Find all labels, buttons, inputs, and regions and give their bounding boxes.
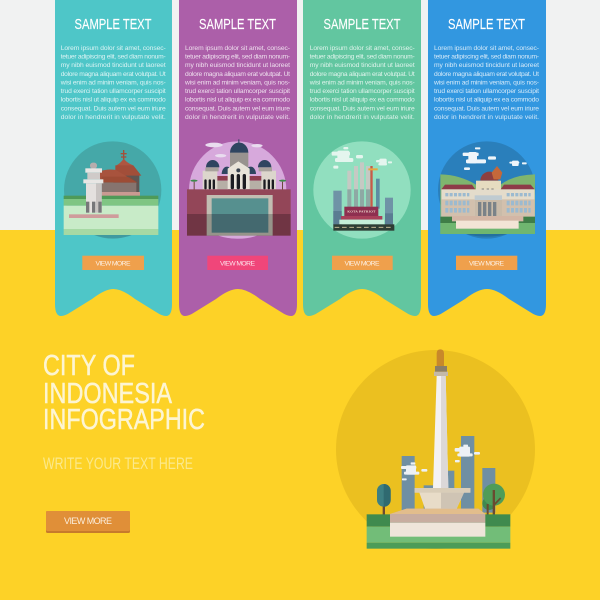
text block 4: [433, 45, 539, 121]
text block 2: trud exerci tation ullamcorper suscipit: [185, 88, 290, 95]
heading: sample text 3: SAMPLE TEXT: [324, 17, 401, 33]
text block 1: lobortis nisl ut aliquip ex ea commodo: [61, 96, 166, 104]
title: INFOGRAPHIC: [43, 404, 205, 436]
button: view more 2: VIEW MORE: [220, 260, 255, 267]
button: view more 3: VIEW MORE: [344, 260, 380, 267]
panel: green ribbon: [303, 0, 421, 316]
text block 4: trud exerci tation ullamcorper suscipit: [434, 88, 539, 95]
text block 2: dolore magna aliquam erat volutpat. Ut: [185, 71, 290, 78]
text block 2: [184, 45, 290, 121]
text block 3: dolore magna aliquam erat volutpat. Ut: [310, 71, 415, 78]
title: INDONESIA: [43, 378, 173, 410]
illustration: tower and temple: [64, 141, 161, 239]
text block 2: my nibh euismod tincidunt ut laoreet: [185, 62, 290, 69]
subtitle: WRITE YOUR TEXT HERE: [43, 455, 193, 473]
plinth: [390, 509, 485, 537]
tree right: [482, 484, 505, 515]
text block 3: lobortis nisl ut aliquip ex ea commodo: [310, 96, 415, 104]
button: view more 2: [207, 256, 268, 270]
background top: [0, 0, 600, 230]
text block 3: consequat. Duis autem vel eum iriure: [310, 106, 415, 112]
panel: purple ribbon: [179, 0, 297, 316]
text block 3: dolor in hendrerit in vulputate velit.: [310, 114, 415, 121]
text block 3: trud exerci tation ullamcorper suscipit: [310, 88, 415, 95]
illustration: kota patriot monument: KOTA PATRIOT: [347, 209, 376, 213]
tree left: [377, 484, 391, 515]
illustration: kota patriot monument: [313, 141, 411, 239]
skyline: [402, 436, 495, 513]
button: view more 4: [456, 256, 517, 270]
text block 4: lobortis nisl ut aliquip ex ea commodo: [434, 96, 539, 104]
backdrop circle: [336, 350, 535, 549]
text block 4: dolor in hendrerit in vulputate velit.: [434, 114, 539, 121]
illustration: governor office: [438, 141, 535, 239]
button: view more main: [46, 511, 130, 533]
text block 1: dolore magna aliquam erat volutpat. Ut: [61, 71, 166, 78]
heading: sample text 2: SAMPLE TEXT: [199, 17, 276, 33]
text block 4: consequat. Duis autem vel eum iriure: [434, 106, 539, 112]
text block 4: Lorem ipsum dolor sit amet, consec-: [434, 45, 539, 52]
button: view more main: VIEW MORE: [64, 516, 112, 526]
title: [43, 350, 205, 436]
panel: blue ribbon: [428, 0, 546, 316]
heading: sample text 4: SAMPLE TEXT: [448, 17, 525, 33]
text block 1: trud exerci tation ullamcorper suscipit: [61, 88, 166, 95]
text block 3: my nibh euismod tincidunt ut laoreet: [310, 62, 415, 69]
text block 3: tetuer adipiscing elit, sed diam nonum-: [310, 54, 415, 60]
text block 1: dolor in hendrerit in vulputate velit.: [61, 114, 166, 121]
text block 3: wisi enim ad minim veniam, quis nos-: [309, 80, 415, 86]
text block 2: tetuer adipiscing elit, sed diam nonum-: [185, 54, 290, 60]
illustration: national monument: [336, 349, 535, 549]
background yellow: [0, 230, 600, 600]
clouds: [401, 445, 480, 480]
heading: sample text 1: SAMPLE TEXT: [74, 17, 152, 33]
text block 1: [60, 45, 166, 121]
obelisk: [415, 349, 470, 509]
text block 4: my nibh euismod tincidunt ut laoreet: [434, 62, 539, 69]
text block 2: Lorem ipsum dolor sit amet, consec-: [185, 45, 290, 52]
text block 1: consequat. Duis autem vel eum iriure: [61, 106, 166, 112]
ground: [367, 514, 510, 527]
text block 1: my nibh euismod tincidunt ut laoreet: [61, 62, 166, 69]
text block 4: tetuer adipiscing elit, sed diam nonum-: [434, 54, 539, 60]
button: view more 3: [332, 256, 393, 270]
title: CITY OF: [43, 350, 135, 382]
text block 2: lobortis nisl ut aliquip ex ea commodo: [185, 96, 290, 104]
text block 3: [309, 45, 415, 121]
text block 1: tetuer adipiscing elit, sed diam nonum-: [61, 54, 166, 60]
text block 1: wisi enim ad minim veniam, quis nos-: [60, 80, 166, 86]
panel: teal ribbon: [55, 0, 172, 316]
text block 3: Lorem ipsum dolor sit amet, consec-: [310, 45, 415, 52]
text block 2: wisi enim ad minim veniam, quis nos-: [184, 80, 290, 86]
illustration: grand mosque: [187, 139, 291, 239]
text block 4: wisi enim ad minim veniam, quis nos-: [433, 80, 539, 86]
text block 2: consequat. Duis autem vel eum iriure: [185, 106, 290, 112]
button: view more 4: VIEW MORE: [469, 260, 504, 267]
button: view more 1: VIEW MORE: [96, 260, 131, 267]
text block 4: dolore magna aliquam erat volutpat. Ut: [434, 71, 539, 78]
text block 2: dolor in hendrerit in vulputate velit.: [185, 114, 290, 121]
button: view more 1: [82, 256, 144, 270]
text block 1: Lorem ipsum dolor sit amet, consec-: [61, 45, 166, 52]
